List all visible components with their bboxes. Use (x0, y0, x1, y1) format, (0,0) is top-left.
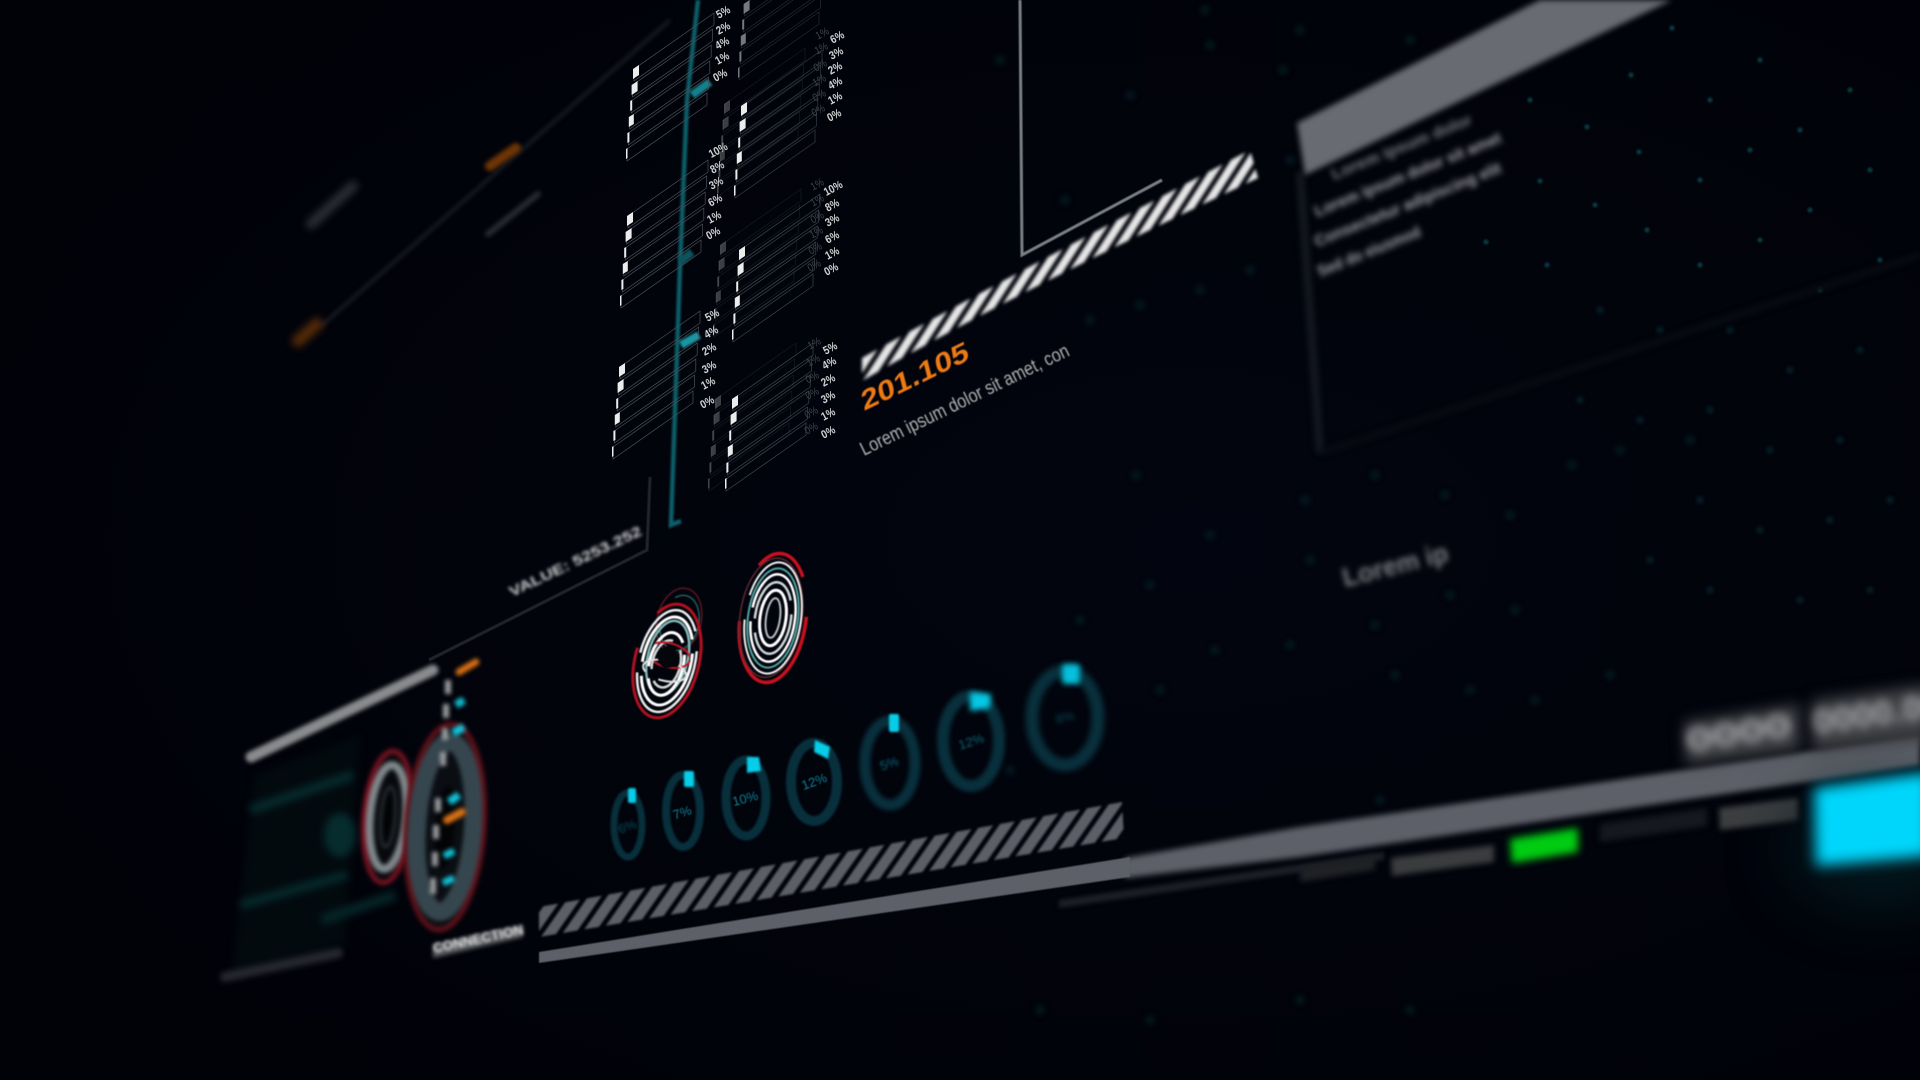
ring 5 value: 5% (878, 753, 901, 774)
ring 1 value: 6% (616, 816, 639, 837)
value text: VALUE: 5253.252 (506, 523, 645, 601)
baseline right (1125, 735, 1920, 878)
ring 4 marker (814, 740, 830, 759)
percent labels A: 4% (713, 34, 732, 53)
panel text rows: Lorem ipsum dolor (1329, 112, 1475, 184)
panel text rows: Sed do eiusmod (1315, 224, 1423, 281)
percent labels E: 8% (823, 196, 842, 215)
percent labels A: 0% (711, 66, 730, 85)
progress ring 2 (666, 771, 700, 847)
percent labels F: 2% (819, 371, 838, 390)
widget footer bar (225, 953, 338, 977)
percent labels F (803, 336, 840, 442)
percent labels C: 1% (699, 374, 718, 393)
percent labels D: 0% (811, 88, 828, 105)
bar chart group D (717, 26, 847, 198)
percent labels F: 3% (819, 388, 838, 407)
status light green (1510, 828, 1578, 863)
swirl gauge right (731, 549, 815, 687)
panel header band (1297, 0, 1672, 175)
percent labels A: 1% (713, 49, 732, 68)
percent labels F: 0% (804, 386, 821, 403)
percent labels B: 8% (708, 158, 727, 177)
percent labels D: 1% (826, 89, 845, 108)
percent labels B: 1% (705, 208, 724, 227)
percent labels F: 0% (803, 421, 820, 438)
striped bar grey (539, 802, 1124, 937)
progress ring 3 (726, 757, 766, 836)
percent labels D: 0% (810, 103, 827, 120)
ring 2 value: 7% (671, 802, 694, 823)
number 201.105: 201.105 (858, 335, 972, 417)
percent labels D: 1% (814, 26, 831, 43)
ring 6 value: 12% (956, 730, 986, 753)
percent labels E: 1% (823, 244, 842, 263)
percent labels D: 4% (826, 74, 845, 93)
progress ring 7 (1032, 664, 1098, 765)
percent labels E: 1% (809, 193, 826, 210)
bar chart group E (713, 177, 845, 342)
percent labels E (806, 177, 845, 279)
ring 4 value: 12% (799, 770, 829, 793)
second numeral block (1812, 684, 1920, 752)
teal marker top (692, 82, 710, 95)
panel base line (1320, 255, 1920, 453)
progress ring 4 (791, 740, 837, 821)
bar chart group A (626, 3, 733, 161)
percent labels F: 1% (805, 353, 822, 370)
percent labels D: 1% (811, 73, 828, 90)
percent labels D: 6% (828, 28, 847, 47)
bar chart group F (708, 336, 840, 491)
ring 7 marker (1062, 664, 1080, 684)
percent labels F: 4% (820, 354, 839, 373)
percent labels A (711, 3, 733, 85)
left widget (225, 662, 525, 977)
bar chart group B (620, 140, 730, 308)
percent labels D: 0% (812, 58, 829, 75)
percent labels E: 1% (808, 225, 825, 242)
percent labels C: 4% (702, 323, 721, 342)
percent labels C: 0% (698, 393, 717, 412)
percent labels F: 0% (803, 405, 820, 422)
right panel frame (1297, 0, 1920, 453)
ring 3 marker (747, 757, 761, 773)
panel text rows (1312, 112, 1505, 281)
percent labels C: 5% (703, 306, 722, 325)
percent labels E: 1% (809, 177, 826, 194)
frame outline upper centre (1020, 0, 1162, 255)
ring 3 value: 10% (731, 788, 760, 809)
percent labels E: 0% (806, 258, 823, 275)
teal marker lower (681, 335, 699, 345)
faint lower strip (1059, 852, 1384, 908)
percent labels B: 0% (704, 224, 723, 243)
bar chart group C (612, 306, 722, 459)
ring 1 marker (628, 788, 636, 803)
blurred caption left (311, 186, 353, 224)
percent labels F: 1% (819, 405, 838, 424)
widget chart panel (232, 735, 395, 975)
large disc gauge (399, 722, 491, 932)
ring 7 value: 8% (1054, 708, 1077, 727)
panel text rows: Lorem ipsum dolor sit amet (1312, 130, 1505, 221)
percent labels F: 5% (821, 339, 840, 358)
numeral text (1683, 686, 1920, 759)
status light cyan glow (1790, 795, 1920, 905)
bar chart group top stub (738, 0, 826, 80)
percent labels E: 10% (822, 178, 845, 199)
percent labels E: 6% (823, 228, 842, 247)
percent labels C: 3% (700, 358, 719, 377)
percent labels A: 2% (714, 19, 733, 38)
long baseline bar (539, 735, 1920, 963)
striped progress bar bright (862, 150, 1258, 381)
widget header bar (251, 670, 433, 757)
percent labels B: 6% (706, 191, 725, 210)
percent labels D: 1% (813, 41, 830, 58)
connection label: CONNECTION (431, 921, 525, 956)
blurred caption right (488, 194, 538, 234)
percent labels F: 1% (806, 336, 823, 353)
ring 2 marker (684, 771, 694, 787)
percent labels C: 2% (700, 340, 719, 359)
caption lorem ipsum: Lorem ipsum dolor sit amet, con (857, 341, 1073, 460)
ring 5 marker (889, 714, 899, 732)
progress ring 5 (865, 714, 915, 805)
orange tag lower (298, 324, 317, 341)
ring 6 marker (970, 692, 991, 711)
panel text rows: Consectetur adipiscing elit (1312, 160, 1505, 251)
percent labels D: 3% (827, 44, 846, 63)
percent labels B: 3% (707, 174, 726, 193)
percent labels B: 10% (707, 140, 730, 161)
percent labels C (698, 306, 722, 412)
percent labels A: 5% (714, 3, 733, 22)
panel: top left link line (298, 20, 670, 341)
orange tag upper (490, 148, 516, 166)
blurred lorem label: Lorem ip (1339, 538, 1451, 593)
widget legend dots (433, 662, 476, 894)
teal marker middle (680, 252, 692, 262)
status light cyan (1814, 772, 1920, 866)
percent labels D: 2% (826, 59, 845, 78)
progress ring 1 (614, 788, 642, 857)
percent labels F: 0% (819, 423, 838, 442)
background dot grid (1000, 10, 1890, 1020)
percent labels E: 0% (807, 241, 824, 258)
value caption with bracket (429, 477, 650, 660)
percent labels E: 3% (823, 211, 842, 230)
teal vertical timeline (671, 0, 710, 525)
swirl gauge left (622, 580, 716, 725)
percent labels E: 0% (822, 260, 841, 279)
percent labels D (810, 26, 847, 125)
progress ring 6 (943, 692, 999, 786)
percent labels B (704, 140, 730, 243)
percent labels D: 0% (825, 106, 844, 125)
percent labels E: 0% (809, 210, 826, 227)
small disc gauge (358, 749, 418, 885)
percent labels F: 0% (804, 370, 821, 387)
blurred numerals right (1684, 684, 1920, 765)
numeral text: 0000 (1683, 707, 1794, 759)
status segments (1300, 798, 1798, 882)
